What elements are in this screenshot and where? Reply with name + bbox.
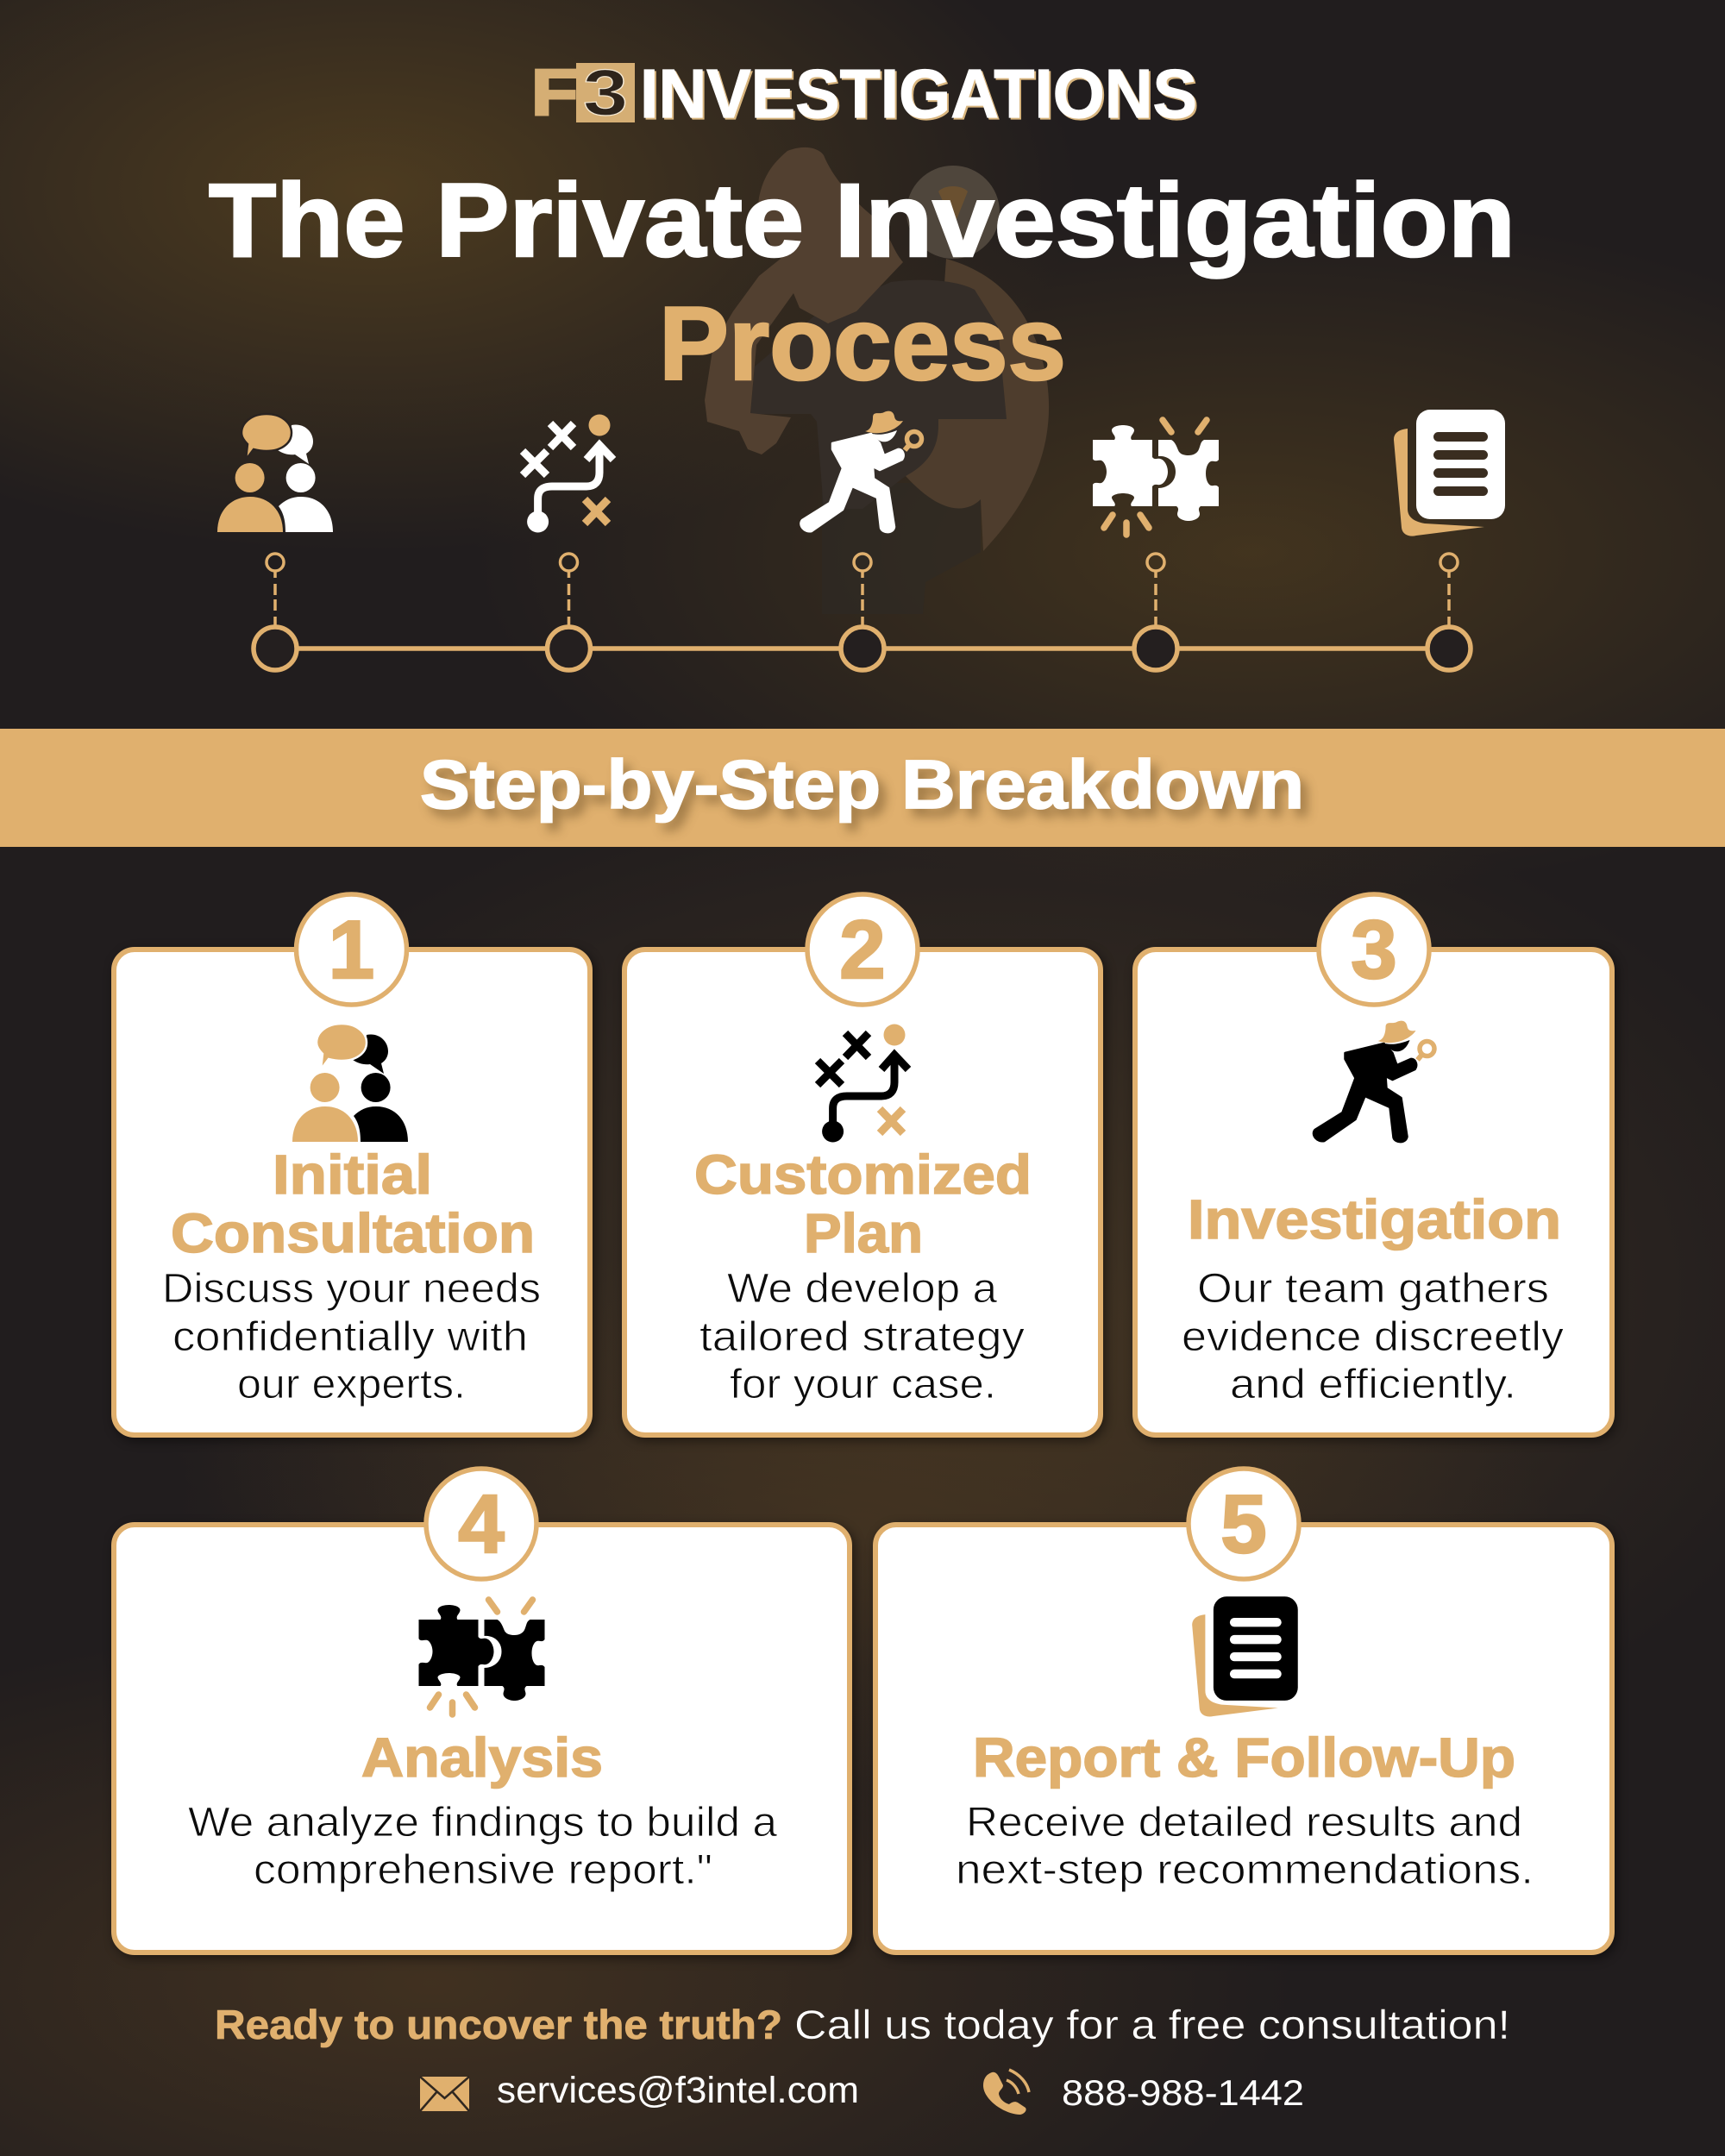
heading: Consultation (171, 1202, 535, 1264)
description: confidentially with (172, 1314, 528, 1360)
logo mark F3: F (531, 56, 578, 128)
icon: puzzle (419, 1600, 545, 1714)
number badge 4 (426, 1469, 536, 1579)
banner: step-by-step breakdown: Step-by-Step Breakdown (420, 746, 1304, 823)
number badge 2: 2 (839, 904, 886, 996)
description (1182, 1266, 1564, 1407)
icon: envelope (420, 2077, 469, 2111)
icon row (217, 410, 1505, 536)
heading: Initial (273, 1144, 432, 1206)
logo wordmark: INVESTIGATIONS (640, 55, 1197, 132)
logo: F3 Investigations (531, 55, 1197, 132)
description (188, 1800, 777, 1893)
card (624, 950, 1101, 1435)
icon: detective (1314, 1021, 1434, 1142)
logo mark F3 (531, 56, 635, 128)
icon: report (1394, 410, 1505, 536)
description: comprehensive report." (254, 1847, 712, 1893)
call to action: Call us today for a free consultation! (794, 2002, 1510, 2047)
description: our experts. (237, 1362, 466, 1407)
card (875, 1525, 1612, 1952)
panel: step 2 customized plan (624, 894, 1101, 1435)
banner: step-by-step breakdown (0, 729, 1725, 847)
logo mark F3: 3 (583, 56, 628, 128)
number badge 4: 4 (458, 1478, 505, 1570)
contact: email: services@f3intel.com (497, 2070, 859, 2111)
number badge 1 (297, 894, 407, 1005)
panel: step 5 report and follow-up (875, 1469, 1612, 1952)
panel: step 4 analysis (114, 1469, 850, 1952)
description: next-step recommendations. (956, 1847, 1534, 1893)
icon: puzzle (1093, 420, 1219, 535)
title: Process (659, 285, 1066, 402)
call to action (215, 2002, 1510, 2047)
description: tailored strategy (699, 1314, 1025, 1360)
description: evidence discreetly (1182, 1314, 1564, 1360)
description: We analyze findings to build a (188, 1800, 777, 1846)
card (114, 1525, 850, 1952)
icon: report (1192, 1596, 1298, 1717)
heading: Customized (694, 1144, 1032, 1206)
number badge 1: 1 (329, 904, 374, 996)
icon: strategy plan (523, 414, 613, 533)
contact: phone: 888-988-1442 (1062, 2072, 1304, 2113)
title: The Private Investigation (209, 161, 1515, 279)
heading (171, 1144, 535, 1264)
icon: detective (800, 411, 921, 532)
panel: step 3 investigation (1135, 894, 1612, 1435)
card (114, 950, 590, 1435)
contact: phone (983, 2070, 1304, 2115)
description: Receive detailed results and (966, 1800, 1522, 1846)
description (162, 1266, 541, 1407)
panel: step 1 initial consultation (114, 894, 590, 1435)
icon: strategy plan (818, 1025, 908, 1142)
heading: Investigation (1188, 1188, 1561, 1250)
icon: phone (983, 2070, 1029, 2115)
watermark: detective silhouette (705, 147, 1049, 614)
number badge 2 (807, 894, 918, 1005)
icon: people talking (292, 1024, 408, 1142)
number badge 3: 3 (1351, 904, 1397, 996)
description (699, 1266, 1025, 1407)
call to action: Ready to uncover the truth? (215, 2002, 782, 2047)
number badge 3 (1319, 894, 1429, 1005)
description: for your case. (730, 1362, 996, 1407)
heading: Report & Follow-Up (973, 1727, 1515, 1789)
description: We develop a (727, 1266, 997, 1312)
card (1135, 950, 1612, 1435)
number badge 5: 5 (1220, 1478, 1267, 1570)
heading: Analysis (361, 1727, 603, 1789)
heading (694, 1144, 1032, 1264)
description: Our team gathers (1197, 1266, 1549, 1312)
icon: consultation people (217, 414, 333, 532)
title (209, 161, 1515, 402)
heading: Plan (804, 1202, 923, 1264)
description (956, 1800, 1534, 1893)
description: and efficiently. (1230, 1362, 1516, 1407)
number badge 5 (1189, 1469, 1299, 1579)
description: Discuss your needs (162, 1266, 541, 1312)
timeline (254, 554, 1471, 670)
